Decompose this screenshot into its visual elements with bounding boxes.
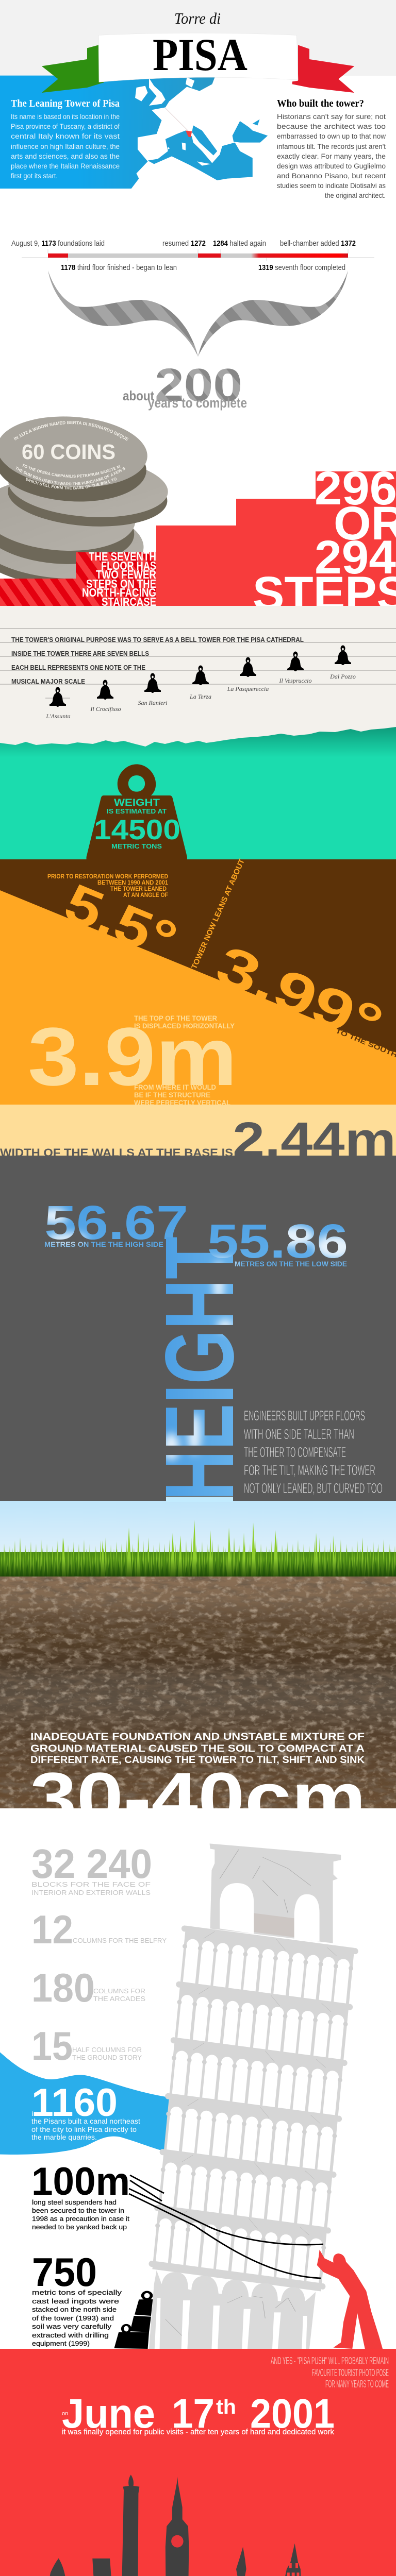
coin 2 <box>6 451 170 532</box>
soil with foundation text: DIFFERENT RATE, CAUSING THE TOWER TO TILT, SHIFT AND SINK <box>30 1755 365 1766</box>
former lean text: AT AN ANGLE OF <box>123 892 168 899</box>
bell names: La Terza <box>189 693 211 700</box>
panel: seventh floor stripes: THE SEVENTH <box>89 550 156 563</box>
text block: The Leaning Tower of Pisa: place where the Italian Renaissance <box>11 162 120 170</box>
coin text: 60 COINS <box>22 440 116 464</box>
former lean text: BETWEEN 1990 AND 2001 <box>97 880 169 886</box>
panel: teal background <box>0 721 396 859</box>
chart: leaning tower skyline <box>35 2475 363 2576</box>
tower: Tiger Hill Pagoda <box>40 2558 68 2576</box>
tower now leans: TOWER NOW LEANS AT ABOUT <box>190 858 246 971</box>
vertical HEIGHT word: HEIGHT <box>145 1236 254 1501</box>
bell tower text: INSIDE THE TOWER THERE ARE SEVEN BELLS <box>11 650 149 657</box>
5.5 degrees: 5.5° <box>56 872 185 972</box>
icon: lead weights <box>114 2292 153 2349</box>
former lean text <box>47 874 169 899</box>
tower base arches <box>149 2270 316 2349</box>
200 years to complete: 200 <box>155 360 242 411</box>
bell tower text: THE TOWER'S ORIGINAL PURPOSE WAS TO SERVE AS A BELL TOWER FOR THE PISA CATHEDRAL <box>11 636 304 643</box>
orange slope <box>0 890 396 1105</box>
icon: bell L'Assunta <box>50 687 66 707</box>
bell names: San Ranieri <box>138 699 167 706</box>
June 17th 2001 <box>62 2391 335 2436</box>
timeline labels: August 9, 1173 foundations laid <box>11 239 105 248</box>
timeline labels: 1178 third floor finished - began to lean <box>61 263 177 272</box>
panel: height <box>0 1156 396 1501</box>
sky and grass <box>0 1497 396 1583</box>
white ribbon band <box>98 33 298 82</box>
750 text: 750 <box>32 2249 97 2295</box>
icon: bell Il Vespruccio <box>287 652 304 671</box>
text block: Who built the tower: exactly clear. For many years, the <box>277 152 386 160</box>
soil with foundation text: GROUND MATERIAL CAUSED THE SOIL TO COMPACT AT A <box>30 1743 365 1754</box>
12 columns: COLUMNS FOR THE BELFRY <box>73 1937 167 1944</box>
stats: blocks and columns <box>31 1841 167 2069</box>
engineers note <box>244 1408 383 1496</box>
timeline labels <box>11 239 356 272</box>
June 17th 2001: 17 <box>172 2391 214 2436</box>
icon: weight <box>87 764 187 859</box>
12 columns: 12 <box>31 1907 73 1952</box>
June 17th 2001: on <box>62 2411 68 2417</box>
panel: 3.9m displacement: WERE PERFECTLY VERTICAL <box>134 1098 230 1107</box>
text block: The Leaning Tower of Pisa: influence on high Italian culture, the <box>11 143 120 150</box>
panel: 296 or 294 steps <box>156 462 396 620</box>
tower: Towers of Bologna <box>92 2475 139 2576</box>
bell names: L'Assunta <box>45 713 71 720</box>
bell names: Dal Pozzo <box>329 673 356 680</box>
icon: person pushing tower <box>317 2250 383 2349</box>
panel: seventh floor stripes <box>0 550 156 608</box>
canal shape <box>0 2052 172 2155</box>
180 columns: THE ARCADES <box>93 1995 145 2003</box>
to the south: TO THE SOUTH <box>335 1027 396 1059</box>
15 half columns: 15 <box>31 2023 73 2069</box>
100m text: needed to be yanked back up <box>32 2223 127 2231</box>
panel: seventh floor stripes: FLOOR HAS <box>101 559 156 572</box>
bell tower text: EACH BELL REPRESENTS ONE NOTE OF THE <box>11 664 145 671</box>
coin 3 <box>0 473 138 570</box>
32 240 blocks: BLOCKS FOR THE FACE OF <box>31 1880 151 1888</box>
100m text: 100m <box>31 2160 130 2204</box>
grass <box>0 1520 396 1579</box>
750 text: soil was very carefully <box>32 2323 112 2330</box>
panel: seventh floor stripes: NORTH-FACING <box>82 586 156 599</box>
map of Europe with intro panel <box>0 76 268 189</box>
panel: white tower section <box>0 1808 396 2349</box>
tower of Pisa <box>148 1843 358 2349</box>
180 columns: COLUMNS FOR <box>93 1987 145 1995</box>
1160 canal text: of the city to link Pisa directly to <box>31 2126 137 2133</box>
tower: Bad Frankenhausen <box>228 2547 248 2576</box>
1160 canal text: 1160 <box>31 2081 118 2125</box>
icon: weight: WEIGHT <box>114 798 160 808</box>
text block: The Leaning Tower of Pisa: first got its start. <box>11 172 58 180</box>
bell tower text <box>11 636 304 685</box>
icon: weight: IS ESTIMATED AT <box>107 807 167 815</box>
bell names: La Pasquereccia <box>227 685 269 692</box>
panel: seventh floor stripes: TWO FEWER <box>96 568 156 581</box>
coin 4 <box>0 497 147 594</box>
panel: 3.9m displacement: BE IF THE STRUCTURE <box>134 1091 210 1099</box>
15 half columns: THE GROUND STORY <box>72 2054 142 2061</box>
180 columns <box>31 1965 145 2010</box>
200 years to complete: about <box>123 388 154 403</box>
timeline labels: resumed 1272 <box>162 239 206 248</box>
ribbon <box>42 33 354 93</box>
text block: Who built the tower: because the architect was too <box>277 123 386 130</box>
former lean text: THE TOWER LEANED <box>110 886 167 892</box>
panel: lean angle <box>0 858 396 1105</box>
750 text: cast lead ingots were <box>32 2297 119 2305</box>
panel: bells on paper <box>0 606 396 747</box>
coin 1 <box>0 412 150 506</box>
text block: Who built the tower: Historians can't say for sure; not <box>277 113 386 121</box>
text block: Who built the tower: the original architect. <box>325 192 386 199</box>
100m text: 1998 as a precaution in case it <box>32 2215 129 2223</box>
timeline labels: 1284 halted again <box>213 239 266 248</box>
750 text: metric tons of specially <box>32 2289 122 2296</box>
panel: seventh floor stripes: STAIRCASE <box>102 595 156 608</box>
wing chart shape <box>48 270 348 357</box>
32 240 blocks: INTERIOR AND EXTERIOR WALLS <box>31 1889 151 1896</box>
1160 canal text: the Pisans built a canal northeast <box>31 2117 140 2125</box>
coin text: THE SUM WAS USED TOWARD THE PURCHASE OF A FEW STONES <box>15 467 125 485</box>
panel: 3.9m displacement: FROM WHERE IT WOULD <box>134 1083 216 1091</box>
panel: red opening date <box>0 2349 396 2576</box>
text block: The Leaning Tower of Pisa <box>11 98 120 180</box>
Pisa push note <box>271 2355 389 2390</box>
panel: 3.9m displacement: THE TOP OF THE TOWER <box>134 1014 217 1022</box>
12 columns <box>31 1907 167 1952</box>
750 text <box>32 2249 122 2347</box>
June 17th 2001: 2001 <box>250 2391 335 2436</box>
100m text: been secured to the tower in <box>32 2207 124 2214</box>
panel: 296 or 294 steps: 296 <box>315 462 396 515</box>
timeline labels: 1319 seventh floor completed <box>258 263 345 272</box>
coin text: WHICH STILL FORM THE BASE OF THE BELL TOWER. <box>26 477 117 489</box>
750 text: equipment (1999) <box>32 2340 90 2347</box>
100m text <box>31 2160 130 2231</box>
200 years to complete: years to complete <box>148 395 247 411</box>
title: Torre di: Torre di <box>174 9 221 27</box>
text block: Who built the tower: embarrassed to own up to that now <box>277 132 386 140</box>
3.99 degrees: 3.99° <box>208 933 391 1056</box>
750 text: stacked on the north side <box>32 2306 117 2313</box>
tower belfry <box>210 1843 341 1943</box>
bell tower text: MUSICAL MAJOR SCALE <box>11 678 85 685</box>
text block: The Leaning Tower of Pisa: Pisa province of Tuscany, a district of <box>11 123 120 130</box>
tower arcade tiers <box>148 1925 358 2292</box>
bell names <box>45 673 356 720</box>
text block: The Leaning Tower of Pisa: The Leaning Tower of Pisa <box>11 98 120 109</box>
text block: Who built the tower: Who built the tower? <box>277 98 364 109</box>
panel: header <box>0 0 396 189</box>
timeline bar <box>22 249 374 261</box>
June 17th 2001: th <box>216 2396 236 2418</box>
icon: weight: 14500 <box>94 814 180 845</box>
title: PISA: PISA <box>153 30 248 80</box>
1160 canal text <box>31 2081 140 2141</box>
1160 canal text: the marble quarries. <box>31 2133 97 2141</box>
1160 canal text: in <box>32 2110 37 2117</box>
32 240 blocks: 32 240 <box>31 1841 152 1887</box>
56.67 high side: METRES ON THE THE HIGH SIDE <box>44 1241 163 1248</box>
panel: 296 or 294 steps: 294 <box>315 531 396 584</box>
coin text: IN 1172 A WIDOW NAMED BERTA DI BERNARDO BEQUEATHED <box>13 421 129 441</box>
opening caption: it was finally opened for public visits - after ten years of hard and dedicated work <box>62 2428 335 2436</box>
icon: bell San Ranieri <box>144 673 161 693</box>
June 17th 2001: June <box>62 2391 155 2436</box>
header grey background <box>0 0 396 76</box>
15 half columns <box>31 2023 142 2069</box>
coin text: TO THE OPERA CAMPANILIS PETRARUM SANCTE MARIE. <box>23 464 121 478</box>
text block: The Leaning Tower of Pisa: Its name is based on its location in the <box>11 113 120 121</box>
stack of coins <box>0 416 168 579</box>
text block: Who built the tower <box>277 98 386 199</box>
100m text: long steel suspenders had <box>32 2198 117 2206</box>
text block: The Leaning Tower of Pisa: central Italy known for its vast <box>11 132 120 140</box>
panel: 3.9m displacement: IS DISPLACED HORIZONTALLY <box>134 1022 235 1030</box>
bell names: Il Crocifisso <box>90 705 121 713</box>
torn paper <box>0 606 396 747</box>
former lean text: PRIOR TO RESTORATION WORK PERFORMED <box>47 874 168 880</box>
towers silhouettes <box>40 2475 356 2576</box>
tower: Big Ben <box>166 2477 189 2576</box>
soil with foundation text: 30-40cm <box>30 1757 366 1838</box>
coin text <box>13 421 129 489</box>
180 columns: 180 <box>31 1965 95 2010</box>
green tail <box>42 45 104 93</box>
text block: Who built the tower: studies seem to indicate Diotisalvi as <box>277 182 386 190</box>
panel: width of walls <box>0 1105 396 1167</box>
text block: The Leaning Tower of Pisa: arts and sciences, and also as the <box>11 152 120 160</box>
timeline labels: bell-chamber added 1372 <box>280 239 356 248</box>
icon: bell Il Crocifisso <box>97 680 113 700</box>
panel: seventh floor stripes: STEPS ON THE <box>86 577 156 590</box>
timeline <box>11 239 374 272</box>
soil with foundation text: INADEQUATE FOUNDATION AND UNSTABLE MIXTURE OF <box>30 1732 365 1742</box>
15 half columns: HALF COLUMNS FOR <box>72 2046 142 2054</box>
red tail <box>292 45 354 93</box>
staff lines <box>0 629 396 698</box>
icon: bell Dal Pozzo <box>335 646 351 665</box>
icon: weight: METRIC TONS <box>111 842 162 850</box>
icon: bell La Terza <box>192 666 209 685</box>
750 text: extracted with drilling <box>32 2331 109 2339</box>
200 years to complete <box>123 360 247 411</box>
bell names: Il Vespruccio <box>279 677 311 684</box>
cables <box>129 2175 323 2278</box>
panel: 3.9m displacement: 3.9m <box>28 1010 237 1103</box>
text block: Who built the tower: design was attributed to Guglielmo <box>277 162 386 170</box>
750 text: of the tower (1993) and <box>32 2314 114 2322</box>
55.86 low side: METRES ON THE THE LOW SIDE <box>235 1260 347 1268</box>
soil with foundation text <box>0 1577 396 1838</box>
brown background <box>0 859 396 1065</box>
text block: Who built the tower: and Bonanno Pisano, but recent <box>277 172 386 180</box>
panel: width of walls: WIDTH OF THE WALLS AT THE BASE IS <box>0 1146 233 1159</box>
55.86 low side: 55.86 <box>207 1214 348 1268</box>
icon: bell La Pasquereccia <box>240 657 256 677</box>
56.67 high side: 56.67 <box>44 1196 188 1249</box>
text block: Who built the tower: infamous tilt. The records just aren't <box>277 143 386 150</box>
tower: Nevyansk <box>280 2544 302 2576</box>
panel: width of walls: 2.44m <box>233 1112 396 1167</box>
